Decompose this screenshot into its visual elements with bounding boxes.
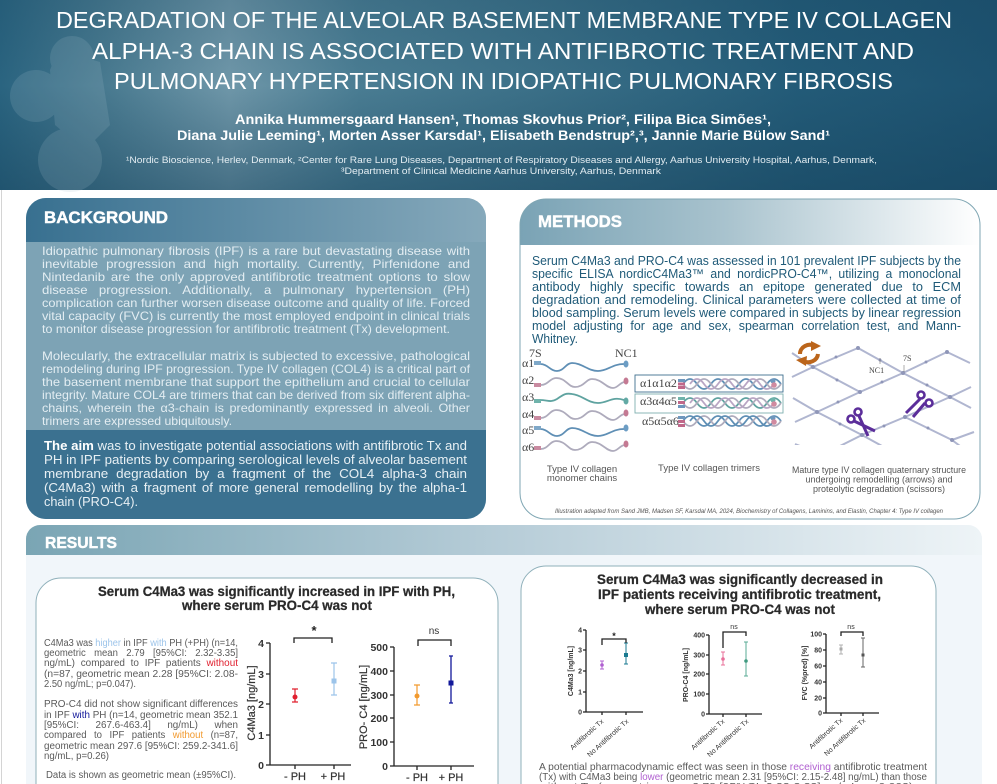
chart: PRO-C4 by treatment: 100 [693, 692, 705, 698]
caption: trimers: Type IV collagen trimers [658, 463, 760, 474]
chart: C4Ma3 by treatment: 3 [578, 648, 582, 654]
chart: PRO-C4 by PH: 300 [370, 690, 388, 702]
chart: C4Ma3 by PH: 0 [258, 760, 264, 772]
text block: background paragraph 1: complication can further worsen disease outcome and quality of life. Forced [42, 296, 470, 310]
chart: C4Ma3 by treatment: 2 [578, 668, 582, 676]
text block: PRO-C4 with PH: in IPF with PH (n=14, geometric mean 352.1 [44, 710, 238, 721]
text block: C4Ma3 with PH: ng/mL) compared to IPF patients without [44, 658, 238, 669]
affiliations [126, 155, 877, 176]
chart: PRO-C4 by PH: 500 [370, 642, 388, 654]
chart: PRO-C4 by treatment: No Antifibrotic Tx [706, 718, 751, 759]
illustration: quaternary lattice [792, 346, 974, 448]
chart: C4Ma3 by treatment [568, 628, 643, 759]
illustration: monomer chains: α5 [522, 423, 534, 437]
text block: aim: membrane degradation by a fragment of the COL4 alpha-3 chain [44, 466, 467, 481]
chart: C4Ma3 by PH: 4 [258, 638, 264, 650]
icon: company logo watermark [10, 36, 110, 192]
text block: background paragraph 2: trimers are expressed ubiquitously. [42, 414, 232, 428]
heading: treatment result: Serum C4Ma3 was significantly decreased in [597, 572, 883, 587]
heading: methods: METHODS [538, 212, 622, 231]
chart: FVC by treatment: 20 [814, 696, 822, 702]
illustration: monomer chains: α3 [522, 390, 534, 404]
caption: quaternary structure: undergoing remodelling (arrows) and [806, 474, 952, 486]
text block: PRO-C4 with PH: PRO-C4 did not show significant differences [44, 699, 238, 710]
page edge line [1, 190, 2, 784]
text block: methods [532, 254, 962, 346]
text block: background paragraph 1: disease progression. Additionally, a pulmonary hypertension (PH) [42, 283, 470, 297]
illustration: quaternary lattice: 7S [903, 354, 911, 363]
text block: pharmacodynamic effect: (Tx) with C4Ma3 being lower (geometric mean 2.31 [95%CI: 2.15-2.48] ng/mL) than those [539, 771, 927, 783]
text block: PRO-C4 with PH: ng/mL, p=0.26) [44, 751, 109, 762]
text block: background paragraph 1: Idiopathic pulmonary fibrosis (IPF) is a rare but devastating disease with [42, 244, 470, 258]
chart: C4Ma3 by PH: * [311, 623, 317, 638]
panel: background [26, 198, 486, 519]
chart: C4Ma3 by treatment: 1 [578, 690, 582, 696]
chart: C4Ma3 by treatment: Antifibrotic Tx [569, 718, 606, 752]
heading: results: RESULTS [45, 535, 117, 552]
chart: PRO-C4 by treatment: 0 [701, 712, 705, 718]
chart: FVC by treatment: ns [847, 624, 855, 631]
text block: background paragraph 1: Nintedanib are the only approved antifibrotic treatment options to slow [42, 270, 470, 284]
caption: quaternary structure [792, 465, 966, 495]
text block: methods: degradation and remodeling. Clinical parameters were collected at time of [532, 293, 962, 307]
text block: methods: antibody highly specific towards an epitope generated due to ECM [532, 280, 961, 294]
chart: PRO-C4 by treatment [683, 624, 762, 759]
chart: C4Ma3 by treatment: 0 [578, 710, 582, 716]
text block: background paragraph 2: remodeling during IPF progression. Type IV collagen (COL4) is a critical part of [42, 362, 471, 376]
illustration: monomer chains: α6 [522, 440, 534, 454]
icon: scissors [848, 392, 932, 436]
illustration: monomer chains: 7S [529, 346, 542, 360]
illustration: monomer chains: NC1 [615, 346, 638, 360]
text block: methods: specific ELISA nordicC4Ma3™ and nordicPRO-C4™, utilizing a monoclonal [532, 267, 961, 281]
text block: background paragraph 2: the basement membrane that support the epithelium and crucial to cellular [42, 375, 470, 389]
affiliations: ¹Nordic Bioscience, Herlev, Denmark, ²Center for Rare Lung Diseases, Department of Respiratory Diseases and Allergy, Aarhus University Hospital, Aarhus, Denmark, [126, 155, 877, 165]
chart: PRO-C4 by PH: - PH [406, 772, 428, 784]
text block: C4Ma3 with PH [44, 638, 238, 690]
chart: PRO-C4 by PH: 200 [370, 713, 388, 725]
text block: background paragraph 1: to monitor disease progression for antifibrotic treatment (Tx) development. [42, 322, 450, 336]
header banner [0, 0, 997, 192]
text block: C4Ma3 with PH: C4Ma3 was higher in IPF with PH (+PH) (n=14, [44, 638, 238, 649]
heading: treatment result [597, 572, 883, 617]
title: PULMONARY HYPERTENSION IN IDIOPATHIC PULMONARY FIBROSIS [114, 68, 893, 94]
text block: aim: PH in IPF patients by comparing serological levels of alveolar basement [44, 452, 467, 467]
chart: PRO-C4 by PH: ns [429, 626, 439, 637]
text block: PRO-C4 with PH: compared to IPF patients without (n=87, [44, 730, 238, 741]
affiliations: ³Department of Clinical Medicine Aarhus University, Aarhus, Denmark [341, 166, 662, 176]
chart: PRO-C4 by PH: PRO- C4 [ng/mL] [358, 665, 370, 749]
text block: background paragraph 2: Molecularly, the extracellular matrix is subjected to excessive, pathological [42, 349, 470, 363]
chart: FVC by treatment: 100 [810, 632, 822, 638]
panel: pulmonary hypertension result [36, 578, 498, 784]
text block: background paragraph 1: vital capacity (FVC) is currently the most employed endpoint in clinical trials [42, 309, 470, 323]
heading: PH result: Serum C4Ma3 was significantly increased in IPF with PH, [98, 584, 455, 599]
title: DEGRADATION OF THE ALVEOLAR BASEMENT MEMBRANE TYPE IV COLLAGEN [56, 7, 952, 33]
text block: methods: model adjusting for age and sex, spearman correlation test, and Mann- [532, 319, 961, 333]
chart: PRO-C4 by PH [358, 626, 474, 784]
illustration: monomer chains [522, 346, 638, 454]
chart: FVC by treatment: Antifibrotic Tx [808, 717, 845, 751]
chart: C4Ma3 by PH: 3 [258, 669, 264, 681]
text block: background paragraph 2: chains, wherein the α3-chain is predominantly expressed in alveoli. Other [42, 401, 470, 415]
illustration: quaternary lattice: NC1 [869, 366, 884, 375]
caption: monomer chains [547, 464, 617, 484]
authors [177, 111, 830, 143]
chart: PRO-C4 by PH: + PH [439, 772, 463, 784]
chart: FVC by treatment: 40 [814, 680, 822, 686]
chart: C4Ma3 by treatment: 4 [578, 628, 582, 634]
panel: antifibrotic treatment result [521, 566, 936, 784]
text block: methods: Serum C4Ma3 and PRO-C4 was assessed in 101 prevalent IPF subjects by the [532, 254, 961, 268]
authors: Annika Hummersgaard Hansen¹, Thomas Skovhus Prior², Filipa Bica Simões¹, [235, 111, 771, 127]
chart: PRO-C4 by PH: 400 [370, 666, 388, 678]
chart: FVC by treatment: 80 [814, 648, 822, 654]
text block: pharmacodynamic effect: A potential pharmacodynamic effect was seen in those receiving antifibrotic treatment [539, 761, 927, 773]
chart: FVC by treatment [802, 624, 879, 758]
chart: C4Ma3 by treatment: No Antifibrotic Tx [586, 718, 631, 759]
text block: aim: (C4Ma3) with a fragment of more general remodelling by the alpha-1 [44, 480, 467, 495]
chart: C4Ma3 by PH [246, 623, 351, 783]
chart: FVC by treatment: FVC (%pred) [%] [802, 646, 809, 700]
note: data description: Data is shown as geometric mean (±95%CI). [46, 770, 236, 781]
chart: C4Ma3 by PH: 2 [258, 699, 264, 711]
illustration: trimers: α3α4α5 [640, 394, 677, 408]
illustration: trimers: α5α5α6 [642, 414, 679, 428]
chart: PRO-C4 by treatment: Antifibrotic Tx [690, 718, 727, 752]
heading: background: BACKGROUND [44, 208, 168, 227]
chart: C4Ma3 by PH: - PH [284, 771, 306, 783]
text block: methods: blood sampling. Serum levels were compared in subjects by linear regression [532, 306, 961, 320]
text block: aim [44, 438, 467, 509]
chart: C4Ma3 by treatment: * [612, 631, 616, 641]
chart: PRO-C4 by PH: 0 [382, 761, 388, 773]
chart: C4Ma3 by treatment: C4Ma3 [ng/mL] [568, 646, 575, 696]
caption: quaternary structure: proteolytic degradation (scissors) [813, 484, 945, 495]
title: ALPHA-3 CHAIN IS ASSOCIATED WITH ANTIFIBROTIC TREATMENT AND [92, 38, 914, 64]
text block: background paragraph 2 [42, 349, 471, 428]
chart: C4Ma3 by PH: C4Ma3 [ng/mL] [246, 665, 258, 741]
text block: background paragraph 1: inevitable progression and high mortality. Currently, Pirfenidone and [42, 257, 470, 271]
chart: FVC by treatment: No Antifibrotic Tx [823, 717, 868, 758]
chart: C4Ma3 by PH: 1 [258, 730, 264, 742]
heading: treatment result: IPF patients receiving antifibrotic treatment, [598, 587, 881, 602]
illustration: trimers: α1α1α2 [640, 376, 677, 390]
illustration: monomer chains: α1 [522, 356, 534, 370]
caption: monomer chains: Type IV collagen [547, 464, 617, 475]
chart: PRO-C4 by treatment: PRO-C4 [ng/mL] [683, 648, 690, 702]
text block: PRO-C4 with PH: [95%CI: 267.6-463.4] ng/mL) when [44, 720, 238, 731]
icon: orange remodelling arrows [796, 341, 821, 366]
chart: PRO-C4 by treatment: ns [730, 624, 738, 631]
chart: PRO-C4 by PH: 100 [370, 737, 388, 749]
chart: FVC by treatment: 60 [814, 664, 822, 670]
chart: PRO-C4 by treatment: 400 [693, 632, 705, 640]
caption: quaternary structure: Mature type IV collagen quaternary structure [792, 465, 966, 476]
text block: PRO-C4 with PH [44, 699, 238, 762]
panel: results [26, 525, 982, 784]
text block: C4Ma3 with PH: 2.50 ng/mL; p=0.047). [44, 679, 136, 690]
text block: methods: Whitney. [532, 332, 578, 346]
text block: pharmacodynamic effect [538, 761, 927, 784]
text block: background paragraph 1 [42, 244, 470, 336]
heading: PH result [98, 584, 455, 613]
heading: PH result: where serum PRO-C4 was not [181, 598, 372, 613]
chart: PRO-C4 by treatment: 300 [693, 652, 705, 660]
authors: Diana Julie Leeming¹, Morten Asser Karsdal¹, Elisabeth Bendstrup²,³, Jannie Marie Bülow Sand¹ [177, 127, 830, 143]
citation: Illustration adapted from Sand JMB, Madsen SF, Karsdal MA, 2024, Biochemistry of Collagens, Laminins, and Elastin, Chapter 4: Type IV collagen [555, 508, 943, 515]
chart: PRO-C4 by treatment: 200 [693, 672, 705, 678]
illustration: monomer chains: α4 [522, 407, 534, 421]
text block: aim: The aim was to investigate potential associations with antifibrotic Tx and [44, 438, 467, 453]
panel: methods [520, 199, 980, 519]
text block: aim: chain (PRO-C4). [44, 494, 138, 509]
illustration: monomer chains: α2 [522, 373, 534, 387]
chart: FVC by treatment: 0 [818, 710, 822, 718]
caption: monomer chains: monomer chains [547, 473, 617, 484]
chart: C4Ma3 by PH: + PH [321, 771, 345, 783]
text block: PRO-C4 with PH: geometric mean 297.6 [95%CI: 259.2-341.6] [44, 741, 238, 752]
text block: background paragraph 2: integrity. Mature COL4 are trimers that can be derived from six different alpha- [42, 388, 470, 402]
illustration: trimers [635, 375, 783, 428]
heading: treatment result: where serum PRO-C4 was not [644, 602, 835, 617]
text block: C4Ma3 with PH: geometric mean 2.79 [95%CI: 2.32-3.35] [44, 648, 238, 659]
text block: C4Ma3 with PH: (n=87, geometric mean 2.28 [95%CI: 2.08- [44, 669, 238, 680]
title [56, 7, 952, 94]
